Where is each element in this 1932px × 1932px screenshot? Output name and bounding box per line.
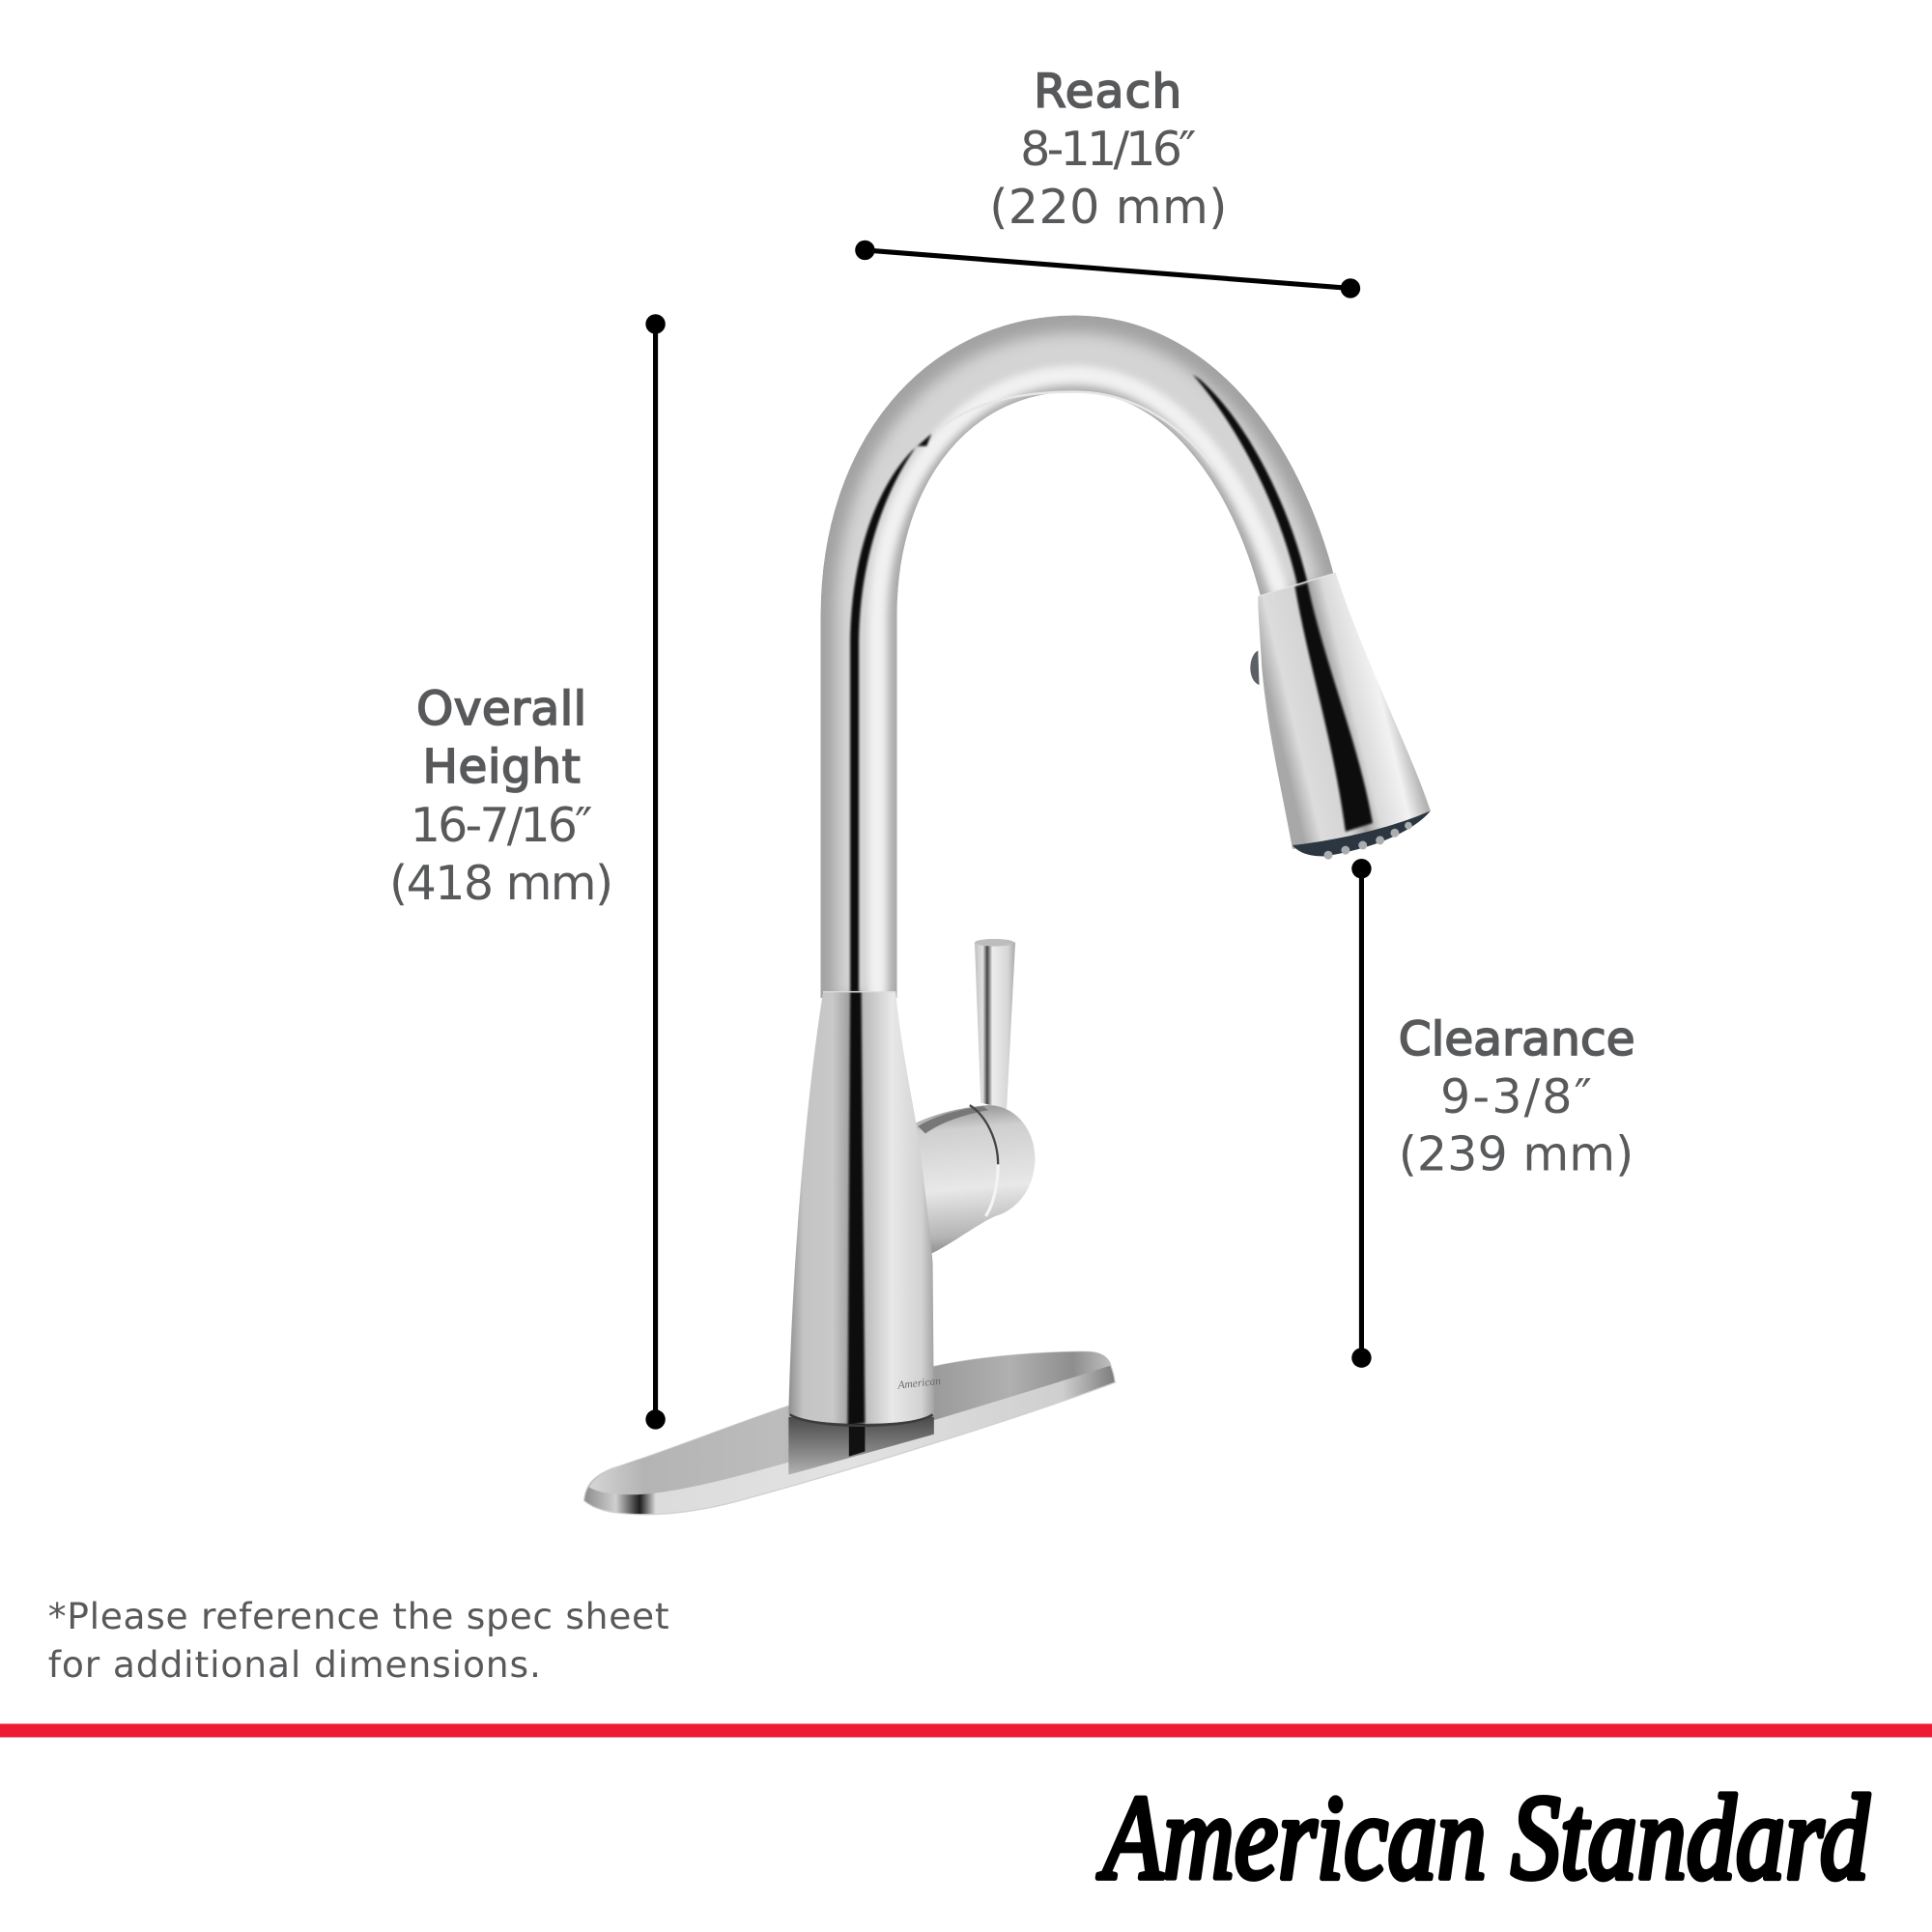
label: reach <box>989 65 1227 235</box>
dimension: clearance <box>1351 859 1372 1368</box>
footnote <box>48 1595 669 1686</box>
spout <box>850 354 1307 998</box>
inner arc highlight <box>936 392 1213 469</box>
left black reflection <box>850 434 931 992</box>
stem reflection <box>788 1417 934 1475</box>
spray head <box>1250 573 1431 860</box>
label: overall height: Height <box>423 740 581 794</box>
label: clearance: 9-3/8″ <box>1440 1068 1592 1124</box>
label: clearance <box>1399 1012 1635 1182</box>
faucet body <box>788 992 942 1426</box>
dimension: reach <box>855 241 1360 298</box>
deck plate <box>584 1351 1115 1515</box>
footnote: for additional dimensions. <box>48 1643 541 1686</box>
label: overall height: 16-7/16″ <box>411 797 593 853</box>
dimension: overall height <box>645 314 666 1430</box>
nozzles <box>1324 822 1412 860</box>
label: reach: (220 mm) <box>989 179 1227 235</box>
label: overall height: Overall <box>416 682 586 736</box>
red divider bar <box>0 1723 1932 1737</box>
footnote: *Please reference the spec sheet <box>48 1595 669 1637</box>
spray face <box>1293 810 1431 856</box>
lever handle <box>975 939 1015 1109</box>
right black reflection <box>1193 375 1307 585</box>
valve hub <box>906 1105 1035 1257</box>
engraved brand: American <box>896 1376 942 1392</box>
label: clearance: (239 mm) <box>1399 1126 1634 1182</box>
spray button <box>1250 650 1260 685</box>
label: overall height <box>389 682 613 911</box>
label: overall height: (418 mm) <box>389 855 613 911</box>
faucet illustration <box>584 354 1431 1515</box>
label: clearance: Clearance <box>1399 1012 1635 1066</box>
label: reach: 8-11/16″ <box>1020 121 1197 177</box>
label: reach: Reach <box>1034 65 1181 119</box>
